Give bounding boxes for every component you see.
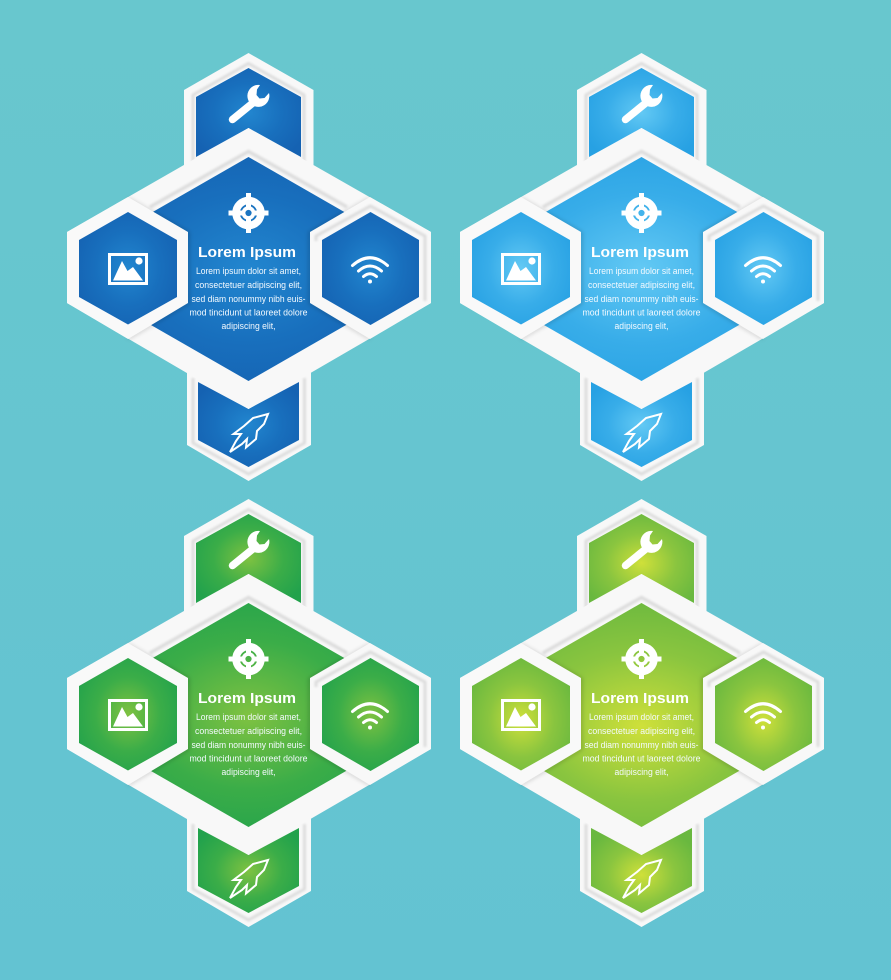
- heading: Lorem Ipsum: [591, 245, 689, 261]
- icon: wifi: [352, 258, 388, 284]
- heading: Lorem Ipsum: [591, 691, 689, 707]
- panel: green hexagon cluster: [67, 499, 431, 927]
- body text: consectetuer adipiscing elit,: [588, 280, 695, 290]
- icon: rocket: [623, 860, 661, 898]
- body text: sed diam nonummy nibh euis-: [584, 740, 698, 750]
- body text: Lorem ipsum dolor sit amet,: [196, 712, 301, 722]
- heading: Lorem Ipsum: [198, 691, 296, 707]
- body text: [190, 266, 308, 331]
- icon: wifi: [746, 258, 780, 284]
- icon: rocket: [230, 860, 268, 898]
- body text: adipiscing elit,: [222, 767, 276, 777]
- body text: [190, 712, 308, 777]
- body text: Lorem ipsum dolor sit amet,: [589, 712, 694, 722]
- icon: rocket: [623, 414, 661, 452]
- icon: wrench: [232, 85, 269, 120]
- body text: [582, 712, 700, 777]
- body text: Lorem ipsum dolor sit amet,: [589, 266, 694, 276]
- body text: consectetuer adipiscing elit,: [588, 726, 695, 736]
- icon: wrench: [626, 531, 662, 566]
- icon: target: [622, 639, 662, 679]
- icon: rocket: [230, 414, 268, 452]
- icon: target: [228, 639, 268, 679]
- icon: wrench: [232, 531, 269, 566]
- icon: wrench: [626, 85, 662, 120]
- panel: dark blue hexagon cluster: [67, 53, 431, 481]
- panel: sky blue hexagon cluster: [460, 53, 824, 481]
- body text: sed diam nonummy nibh euis-: [584, 294, 698, 304]
- icon: image: [502, 254, 540, 284]
- body text: mod tincidunt ut laoreet dolore: [582, 754, 700, 764]
- icon: wifi: [746, 704, 780, 730]
- icon: image: [502, 700, 540, 730]
- icon: target: [228, 193, 268, 233]
- body text: sed diam nonummy nibh euis-: [192, 294, 306, 304]
- body text: adipiscing elit,: [614, 321, 668, 331]
- body text: mod tincidunt ut laoreet dolore: [190, 754, 308, 764]
- body text: mod tincidunt ut laoreet dolore: [190, 308, 308, 318]
- body text: Lorem ipsum dolor sit amet,: [196, 266, 301, 276]
- heading: Lorem Ipsum: [198, 245, 296, 261]
- icon: wifi: [352, 704, 388, 730]
- body text: [582, 266, 700, 331]
- panel: lime hexagon cluster: [460, 499, 824, 927]
- icon: image: [110, 700, 146, 730]
- body text: mod tincidunt ut laoreet dolore: [582, 308, 700, 318]
- body text: adipiscing elit,: [614, 767, 668, 777]
- body text: consectetuer adipiscing elit,: [195, 280, 302, 290]
- icon: target: [622, 193, 662, 233]
- body text: adipiscing elit,: [222, 321, 276, 331]
- icon: image: [110, 254, 146, 284]
- body text: consectetuer adipiscing elit,: [195, 726, 302, 736]
- body text: sed diam nonummy nibh euis-: [192, 740, 306, 750]
